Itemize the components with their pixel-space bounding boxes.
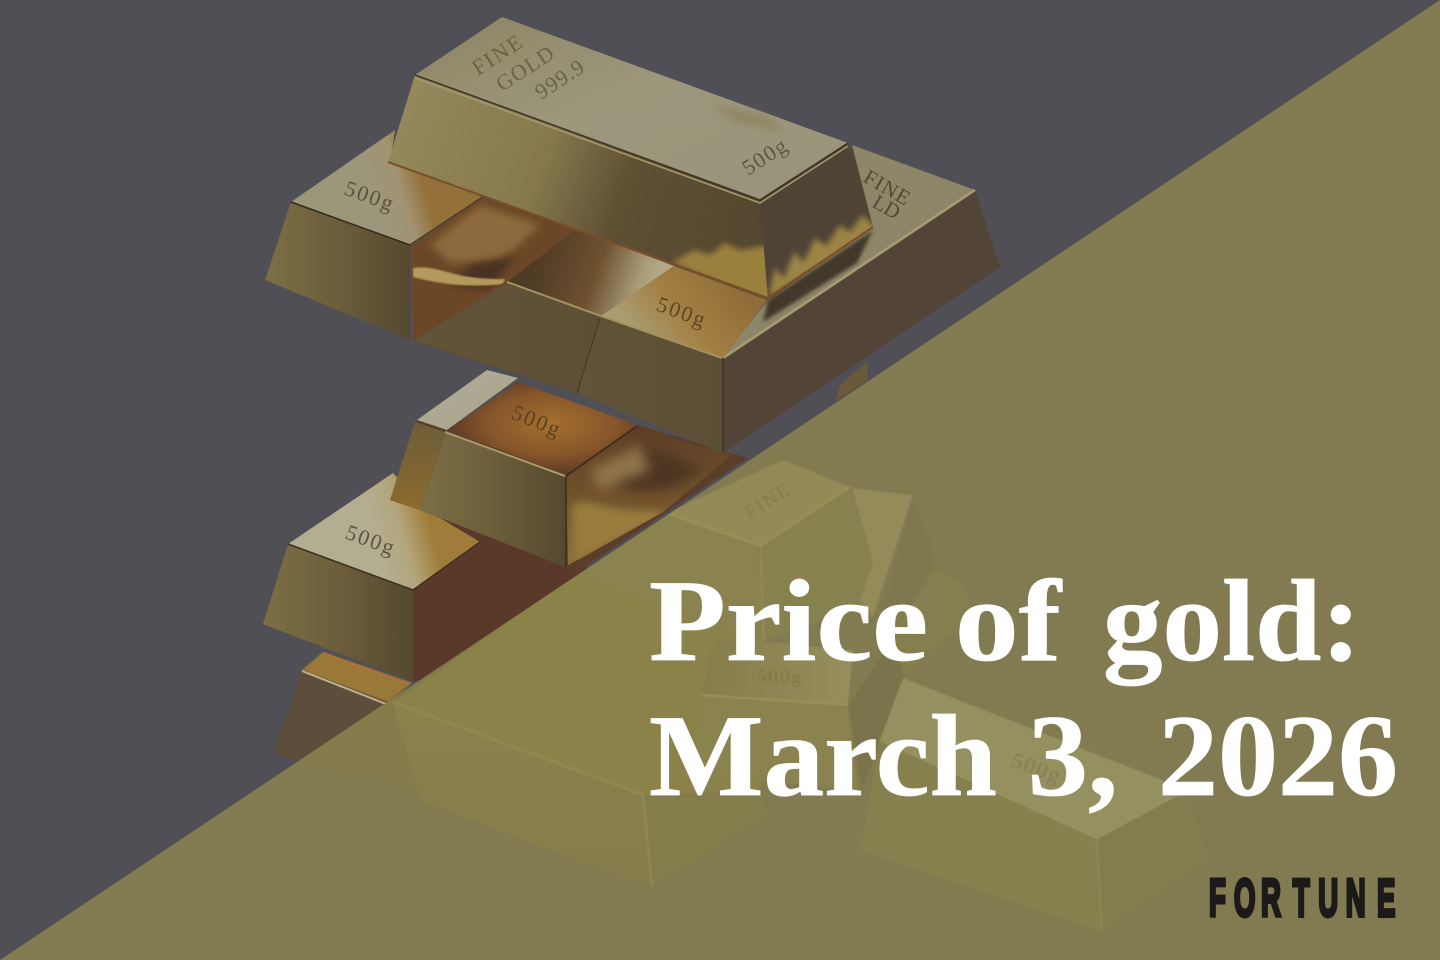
label: FINE: FINE bbox=[860, 165, 915, 211]
title line 1: Price bbox=[649, 557, 928, 686]
title line 2 bbox=[649, 692, 1398, 821]
gold bar: top of stack bbox=[388, 17, 880, 310]
title line 1: of bbox=[955, 557, 1063, 686]
gold bar: lower left with 500g bbox=[263, 473, 600, 682]
gold bar: right base with FINE GOLD bbox=[722, 145, 1000, 453]
gold bar: mid stack with copper top bbox=[390, 370, 748, 572]
title line 2: March bbox=[649, 692, 997, 821]
reflective end panel bbox=[410, 197, 767, 453]
label: FINE: FINE bbox=[741, 478, 795, 524]
faded bar E with 500g bbox=[702, 642, 902, 786]
title line 1: gold: bbox=[1103, 557, 1361, 686]
gold bars seen through the overlay bbox=[393, 460, 1210, 932]
title line 2: 2026 bbox=[1158, 692, 1398, 821]
gold bar: lowest, left bbox=[273, 652, 420, 790]
label: 500g: 500g bbox=[653, 291, 711, 332]
faded bar A with FINE bbox=[577, 460, 873, 640]
label: 500g: 500g bbox=[757, 667, 803, 688]
label: GOLD partial: LD bbox=[868, 190, 905, 224]
title bbox=[649, 557, 1398, 821]
photo: stack of gold bars bbox=[263, 17, 1000, 790]
label: FINE GOLD 999.9: 999.9 bbox=[530, 54, 589, 104]
label: 500g: 500g bbox=[737, 132, 793, 180]
label: FINE GOLD 999.9: FINE bbox=[467, 28, 528, 80]
label: 500g: 500g bbox=[342, 519, 400, 560]
label: 500g: 500g bbox=[341, 175, 399, 216]
faded bars group bbox=[393, 460, 1210, 932]
label: 500g: 500g bbox=[508, 399, 566, 442]
label: 500g: 500g bbox=[1008, 747, 1066, 788]
FORTUNE logo: FORTUNE bbox=[1209, 868, 1395, 927]
label: FINE GOLD 999.9: GOLD bbox=[491, 40, 559, 96]
gold bar: left upper bbox=[265, 130, 483, 340]
title line 1 bbox=[649, 557, 1361, 686]
faded lower bar D bbox=[393, 573, 770, 887]
gold bar: right front faces bbox=[415, 282, 723, 453]
title line 2: 3, bbox=[1028, 692, 1118, 821]
faded small bar G bbox=[890, 570, 973, 680]
faded bar F behind bbox=[852, 488, 912, 616]
label: FINE GOLD 999.9 bbox=[467, 28, 589, 104]
faded bar C with 500g bbox=[880, 678, 1178, 932]
